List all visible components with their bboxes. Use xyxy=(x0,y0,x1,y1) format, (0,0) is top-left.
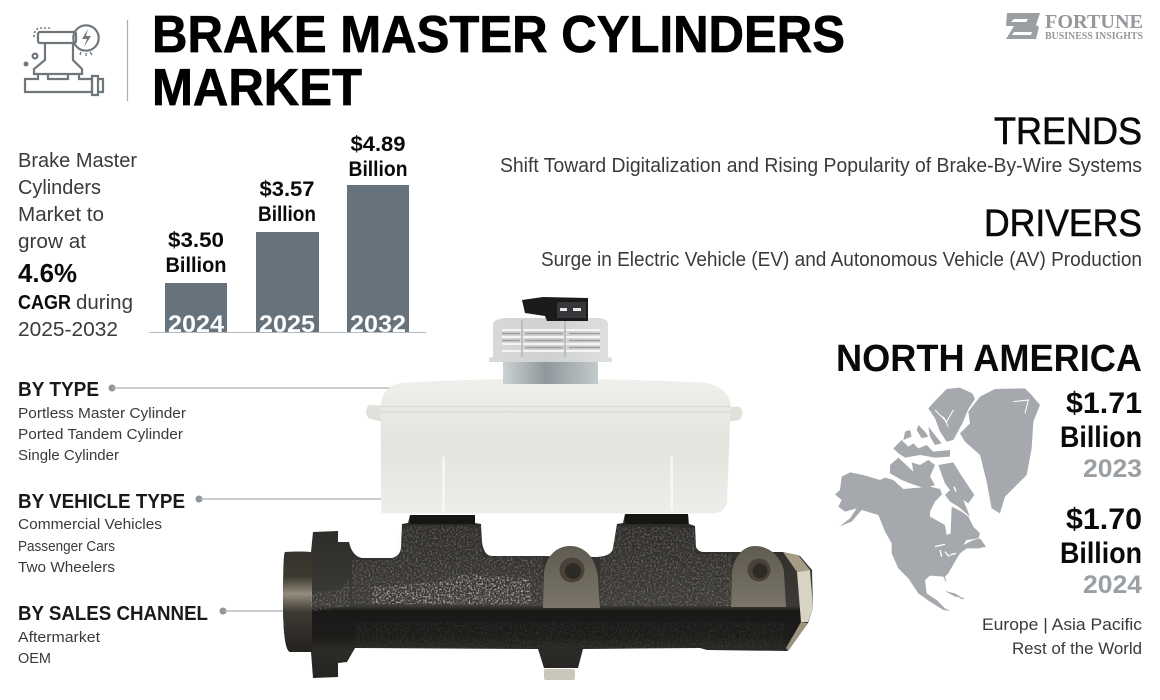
value labels: $3.50 xyxy=(168,229,224,252)
lakes and coastal details xyxy=(902,487,956,587)
segment: by sales channel xyxy=(18,603,284,667)
logo: Fortune Business Insights xyxy=(1006,11,1143,42)
Greenland xyxy=(960,388,1040,513)
other regions xyxy=(982,615,1143,658)
title: BRAKE MASTER CYLINDERS xyxy=(152,6,845,64)
Victoria and Banks Islands xyxy=(890,458,935,488)
electrical connector xyxy=(522,297,588,321)
reservoir neck xyxy=(503,362,598,384)
icon: brake master cylinder xyxy=(25,25,103,95)
drivers block: Surge in Electric Vehicle (EV) and Autonomous Vehicle (AV) Production xyxy=(541,249,1142,271)
hex end nut xyxy=(783,552,813,651)
value labels: Billion xyxy=(258,203,316,226)
Caribbean islands xyxy=(945,591,965,599)
bottom plug xyxy=(544,669,575,680)
CAGR text block: during xyxy=(76,292,133,314)
header divider xyxy=(126,20,128,101)
year labels xyxy=(168,311,406,338)
segment: by type: BY TYPE xyxy=(18,379,99,401)
mounting lug right xyxy=(731,546,786,607)
segment: by vehicle type: BY VEHICLE TYPE xyxy=(18,491,185,513)
casting highlight band xyxy=(372,574,532,604)
reservoir tank xyxy=(380,379,731,513)
year labels: 2024 xyxy=(168,311,225,338)
other regions: Rest of the World xyxy=(1012,639,1142,658)
logo: Fortune Business Insights: FORTUNE xyxy=(1045,11,1143,33)
trends block xyxy=(500,111,1142,177)
Ellesmere Island xyxy=(928,388,975,442)
bar 2024 xyxy=(165,283,227,333)
machined front bore xyxy=(283,552,312,652)
year labels: 2032 xyxy=(350,311,406,338)
CAGR text block: CAGR xyxy=(18,292,71,314)
lower body texture xyxy=(355,622,785,648)
CAGR text block: Cylinders xyxy=(18,177,101,199)
CAGR text block: Market to xyxy=(18,204,104,226)
reservoir lip xyxy=(366,405,743,422)
Baffin Island xyxy=(938,462,974,517)
segment: by vehicle type: Commercial Vehicles xyxy=(18,516,162,533)
cylinder body xyxy=(283,514,813,678)
region heading: NORTH AMERICA xyxy=(836,338,1142,380)
segment: by sales channel: Aftermarket xyxy=(18,629,101,646)
region values xyxy=(1060,387,1142,599)
segment: by vehicle type xyxy=(18,491,386,576)
bar 2032 xyxy=(347,185,409,333)
flange highlight xyxy=(311,578,350,612)
value 2023: 2023 xyxy=(1083,455,1142,483)
segment: by vehicle type: Passenger Cars xyxy=(18,538,115,555)
value 2024 xyxy=(1060,503,1142,599)
fjords xyxy=(935,400,1028,427)
segment: by vehicle type: Two Wheelers xyxy=(18,559,115,576)
value 2023: Billion xyxy=(1060,421,1142,454)
filler cap xyxy=(489,318,612,362)
CAGR text block xyxy=(18,150,137,341)
Mainland North America xyxy=(835,462,986,611)
Arctic and Greenland xyxy=(890,388,1040,513)
value labels xyxy=(166,133,408,277)
casting texture xyxy=(352,526,732,606)
reservoir body xyxy=(366,379,743,513)
mounting lug left xyxy=(543,546,600,608)
title xyxy=(152,6,845,117)
segment: by type: Single Cylinder xyxy=(18,447,119,464)
Queen Elizabeth Islands xyxy=(893,425,950,458)
CAGR text block: Brake Master xyxy=(18,150,137,172)
logo: Fortune Business Insights: BUSINESS INSIGHTS xyxy=(1045,31,1143,42)
value 2024: 2024 xyxy=(1083,571,1142,599)
segment: by type xyxy=(18,379,390,464)
value labels: Billion xyxy=(166,254,226,277)
other regions: Europe | Asia Pacific xyxy=(982,615,1143,634)
illustration: brake master cylinder xyxy=(283,297,813,680)
value labels: $3.57 xyxy=(260,178,314,201)
value 2023 xyxy=(1060,387,1142,483)
trends block: Shift Toward Digitalization and Rising Popularity of Brake-By-Wire Systems xyxy=(500,155,1142,177)
segment: by type: Portless Master Cylinder xyxy=(18,405,186,422)
title: MARKET xyxy=(152,59,362,117)
value labels: $4.89 xyxy=(350,133,406,156)
drivers block xyxy=(541,203,1142,271)
trends block: TRENDS xyxy=(994,111,1142,153)
bar chart xyxy=(149,133,426,338)
CAGR text block: grow at xyxy=(18,231,86,253)
year labels: 2025 xyxy=(259,311,315,338)
drivers block: DRIVERS xyxy=(984,203,1142,245)
outlet ports xyxy=(410,514,688,524)
CAGR text block: 4.6% xyxy=(18,258,77,288)
map: North America xyxy=(835,388,1040,611)
bar 2025 xyxy=(256,232,319,333)
value 2024: $1.70 xyxy=(1066,503,1142,536)
CAGR text block: 2025-2032 xyxy=(18,319,118,341)
value 2023: $1.71 xyxy=(1066,387,1142,420)
segment: by sales channel: OEM xyxy=(18,650,51,667)
segment: by type: Ported Tandem Cylinder xyxy=(18,426,183,443)
segment: by sales channel: BY SALES CHANNEL xyxy=(18,603,208,625)
value labels: Billion xyxy=(348,158,408,181)
value 2024: Billion xyxy=(1060,537,1142,570)
Continental landmass xyxy=(835,472,986,611)
